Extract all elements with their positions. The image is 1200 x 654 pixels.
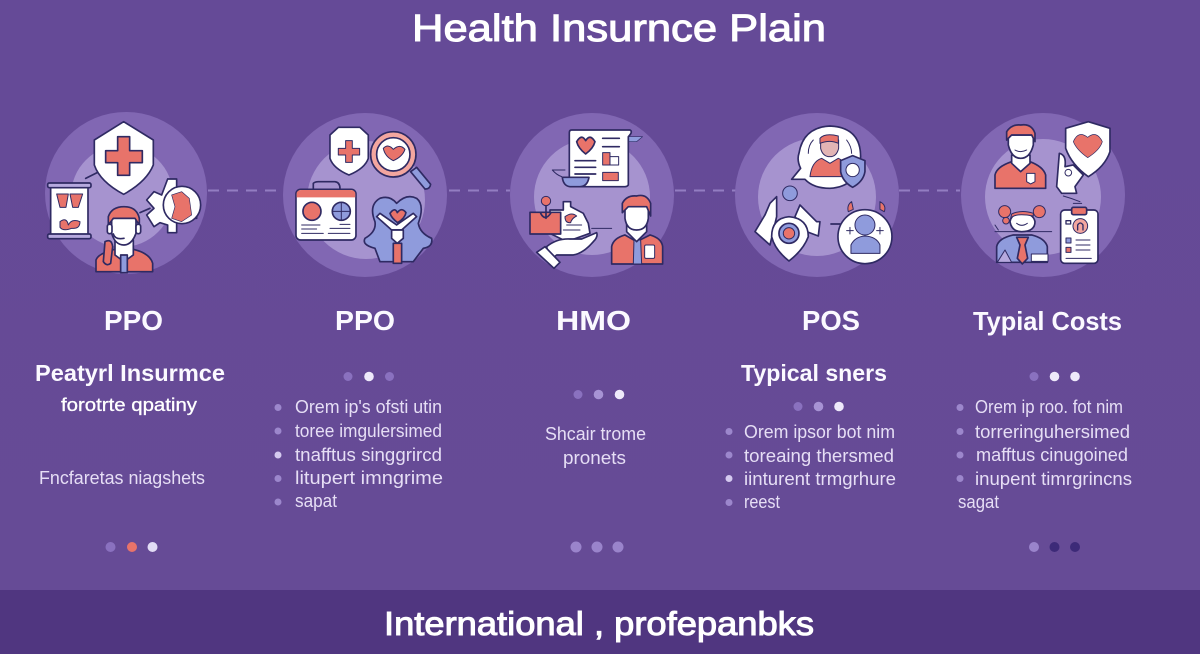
panel: first PPO icon group xyxy=(45,112,207,274)
icon: medical shield xyxy=(86,122,153,194)
list: column two: toree imgulersimed xyxy=(295,421,442,441)
icon: map pin with folded map xyxy=(755,186,820,261)
text block: column one: forotrte qpatiny xyxy=(61,395,197,415)
list: column five xyxy=(956,397,1132,512)
dots: column four xyxy=(794,402,844,411)
icon: clipboard checklist xyxy=(1061,207,1098,263)
list: column four: Orem ipsor bot nim xyxy=(744,422,895,442)
icon: medical document with bowl xyxy=(552,130,643,187)
icon: shield with heart and cat xyxy=(1057,122,1110,203)
panel: POS icon group xyxy=(735,113,899,277)
icon: insurance card xyxy=(296,182,356,240)
panel: Typical Costs icon group xyxy=(961,113,1125,277)
list: column four: iinturent trmgrhure xyxy=(744,469,896,489)
list: column five: torreringuhersimed xyxy=(975,422,1130,442)
footer banner xyxy=(0,590,1200,654)
list: column two: litupert imngrime xyxy=(295,468,443,488)
icon: small shield xyxy=(330,127,368,175)
text block: column one: Peatyrl Insurmce xyxy=(35,360,225,386)
list: column four xyxy=(726,422,896,512)
icon: doctor xyxy=(612,195,663,264)
list: column four: toreaing thersmed xyxy=(744,446,894,466)
dots: column one xyxy=(106,542,158,552)
text block: column three: Shcair trome xyxy=(545,424,646,444)
heading: PPO one: PPO xyxy=(104,305,163,336)
list: column five: inupent timrgrincns xyxy=(975,469,1132,489)
heading: Typical Costs: Typial Costs xyxy=(973,306,1122,336)
list: column four: reest xyxy=(744,492,780,512)
list: column two: tnafftus singgrircd xyxy=(295,445,442,465)
icon: support agent xyxy=(96,207,153,273)
dots: column five top xyxy=(1030,372,1080,381)
icon: girl with pigtails xyxy=(995,206,1052,264)
list: column two: Orem ip's ofsti utin xyxy=(295,397,442,417)
text block: column three: pronets xyxy=(563,448,626,468)
text block: column one: Fncfaretas niagshets xyxy=(39,468,205,488)
icon: man in coral shirt xyxy=(995,125,1046,188)
icon: document scroll xyxy=(48,183,91,239)
dots: column five bottom xyxy=(1029,542,1080,552)
list: column two xyxy=(274,397,443,511)
icon: gear and globe xyxy=(140,179,201,233)
subheading: column four: Typical sners xyxy=(741,360,887,386)
dots: column two xyxy=(344,372,394,381)
list: column five: sagat xyxy=(958,492,999,512)
title: Health Insurnce Plain xyxy=(412,8,826,50)
footer banner: International , profepanbks xyxy=(384,605,814,642)
icon: magnifier with heart xyxy=(371,132,431,189)
text block: column one xyxy=(35,360,225,488)
connector line between plan icons xyxy=(208,190,960,192)
heading: POS: POS xyxy=(802,305,860,336)
icon: user badge xyxy=(831,202,892,264)
list: column two: sapat xyxy=(295,491,337,511)
dots: column three bottom xyxy=(570,542,624,552)
heading: PPO two: PPO xyxy=(335,305,395,336)
icon: heart figure xyxy=(364,197,432,263)
panel: HMO icon group xyxy=(510,113,674,277)
panel: second PPO icon group xyxy=(283,113,447,277)
heading: HMO: HMO xyxy=(556,305,631,336)
icon: speech bubble with person and shield xyxy=(792,126,865,188)
list: column five: mafftus cinugoined xyxy=(976,445,1128,465)
dots: column three top xyxy=(574,390,624,399)
text block: column three xyxy=(545,424,646,468)
icon: hand holding kit xyxy=(530,196,612,268)
list: column five: Orem ip roo. fot nim xyxy=(975,397,1123,417)
